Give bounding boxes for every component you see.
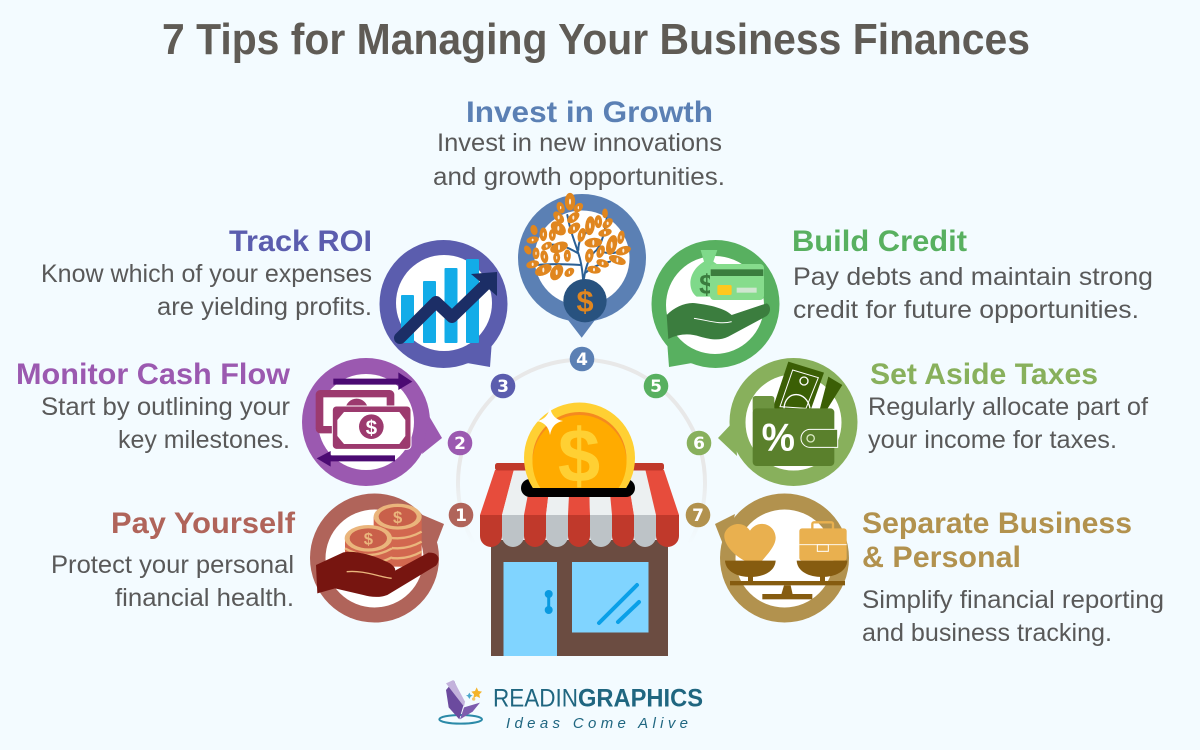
description: and business tracking.: [862, 619, 1112, 647]
panel: Monitor Cash Flow: [16, 358, 442, 486]
heading: Monitor Cash Flow: [16, 358, 291, 391]
badge 7: [686, 503, 710, 527]
logo tagline: Ideas Come Alive: [506, 715, 688, 732]
description: [793, 263, 1153, 324]
icon: money tree: $: [576, 284, 594, 318]
number badges: [448, 347, 711, 527]
door: [504, 562, 557, 656]
badge 5: 5: [650, 377, 662, 397]
badge 3: [491, 374, 515, 398]
description: Know which of your expenses: [41, 260, 372, 288]
description: [433, 129, 725, 191]
description: are yielding profits.: [157, 293, 372, 321]
description: your income for taxes.: [868, 426, 1117, 454]
panel: Pay Yourself: [51, 494, 444, 622]
heading: Build Credit: [792, 225, 967, 258]
description: Start by outlining your: [41, 393, 290, 421]
description: Protect your personal: [51, 551, 294, 579]
icon: credit card in hand: $: [699, 269, 714, 300]
description: key milestones.: [118, 426, 290, 454]
icon: coins in hand: [310, 494, 444, 622]
logo wordmark: READINGRAPHICS: [493, 684, 703, 712]
panel: Track ROI: [41, 225, 508, 368]
awning: [480, 463, 679, 547]
heading: Separate Business: [862, 507, 1132, 540]
store wall: [491, 540, 668, 656]
badge 7: 7: [692, 506, 704, 526]
coin slot: [521, 479, 635, 497]
icon: coins in hand: $: [364, 530, 374, 549]
icon: credit card in hand: [652, 240, 780, 368]
coin: [524, 402, 635, 488]
description: and growth opportunities.: [433, 163, 725, 191]
badge 4: [570, 347, 594, 371]
panel: Separate Business & Personal: [715, 494, 1164, 647]
heading: Pay Yourself: [111, 507, 296, 540]
description: Invest in new innovations: [437, 129, 722, 157]
badge 1: [449, 503, 473, 527]
title: 7 Tips for Managing Your Business Finances: [162, 15, 1030, 64]
icon: money tree: [518, 193, 646, 338]
panel: Invest in Growth: [433, 96, 725, 338]
badge 6: [687, 431, 711, 455]
progress arc: [458, 360, 705, 544]
description: [41, 393, 290, 454]
description: credit for future opportunities.: [793, 296, 1139, 324]
logo: Reading Graphics: [439, 680, 703, 732]
icon: coins in hand: $: [393, 508, 403, 527]
heading: & Personal: [862, 541, 1021, 574]
badge 4: 4: [576, 350, 588, 370]
panel: Build Credit: [652, 225, 1153, 368]
heading: Set Aside Taxes: [870, 358, 1098, 391]
badge 6: 6: [693, 434, 705, 454]
icon: growth chart: [380, 240, 508, 368]
panel: Set Aside Taxes: [718, 358, 1148, 486]
heading: [862, 507, 1132, 574]
description: [862, 586, 1164, 647]
badge 3: 3: [497, 377, 509, 397]
logo mark: book and stars: [439, 680, 482, 724]
icon: cash flow bills: $: [366, 416, 378, 439]
icon: balance scale: [715, 494, 849, 622]
description: [51, 551, 294, 612]
coin: $: [558, 414, 600, 499]
icon: cash flow bills: [302, 358, 442, 486]
illustration: storefront with coin: [480, 402, 679, 656]
description: [868, 393, 1148, 454]
icon: wallet with percent: %: [762, 416, 795, 460]
badge 5: [644, 374, 668, 398]
badge 1: 1: [455, 506, 467, 526]
badge 2: [448, 431, 472, 455]
description: financial health.: [115, 584, 294, 612]
description: Regularly allocate part of: [868, 393, 1148, 421]
heading: Invest in Growth: [466, 96, 713, 129]
description: Simplify financial reporting: [862, 586, 1164, 614]
description: Pay debts and maintain strong: [793, 263, 1153, 291]
description: [41, 260, 372, 321]
window: [572, 562, 648, 632]
icon: wallet with percent: [718, 358, 858, 486]
heading: Track ROI: [229, 225, 372, 258]
badge 2: 2: [454, 434, 466, 454]
sparkle: [537, 407, 563, 435]
